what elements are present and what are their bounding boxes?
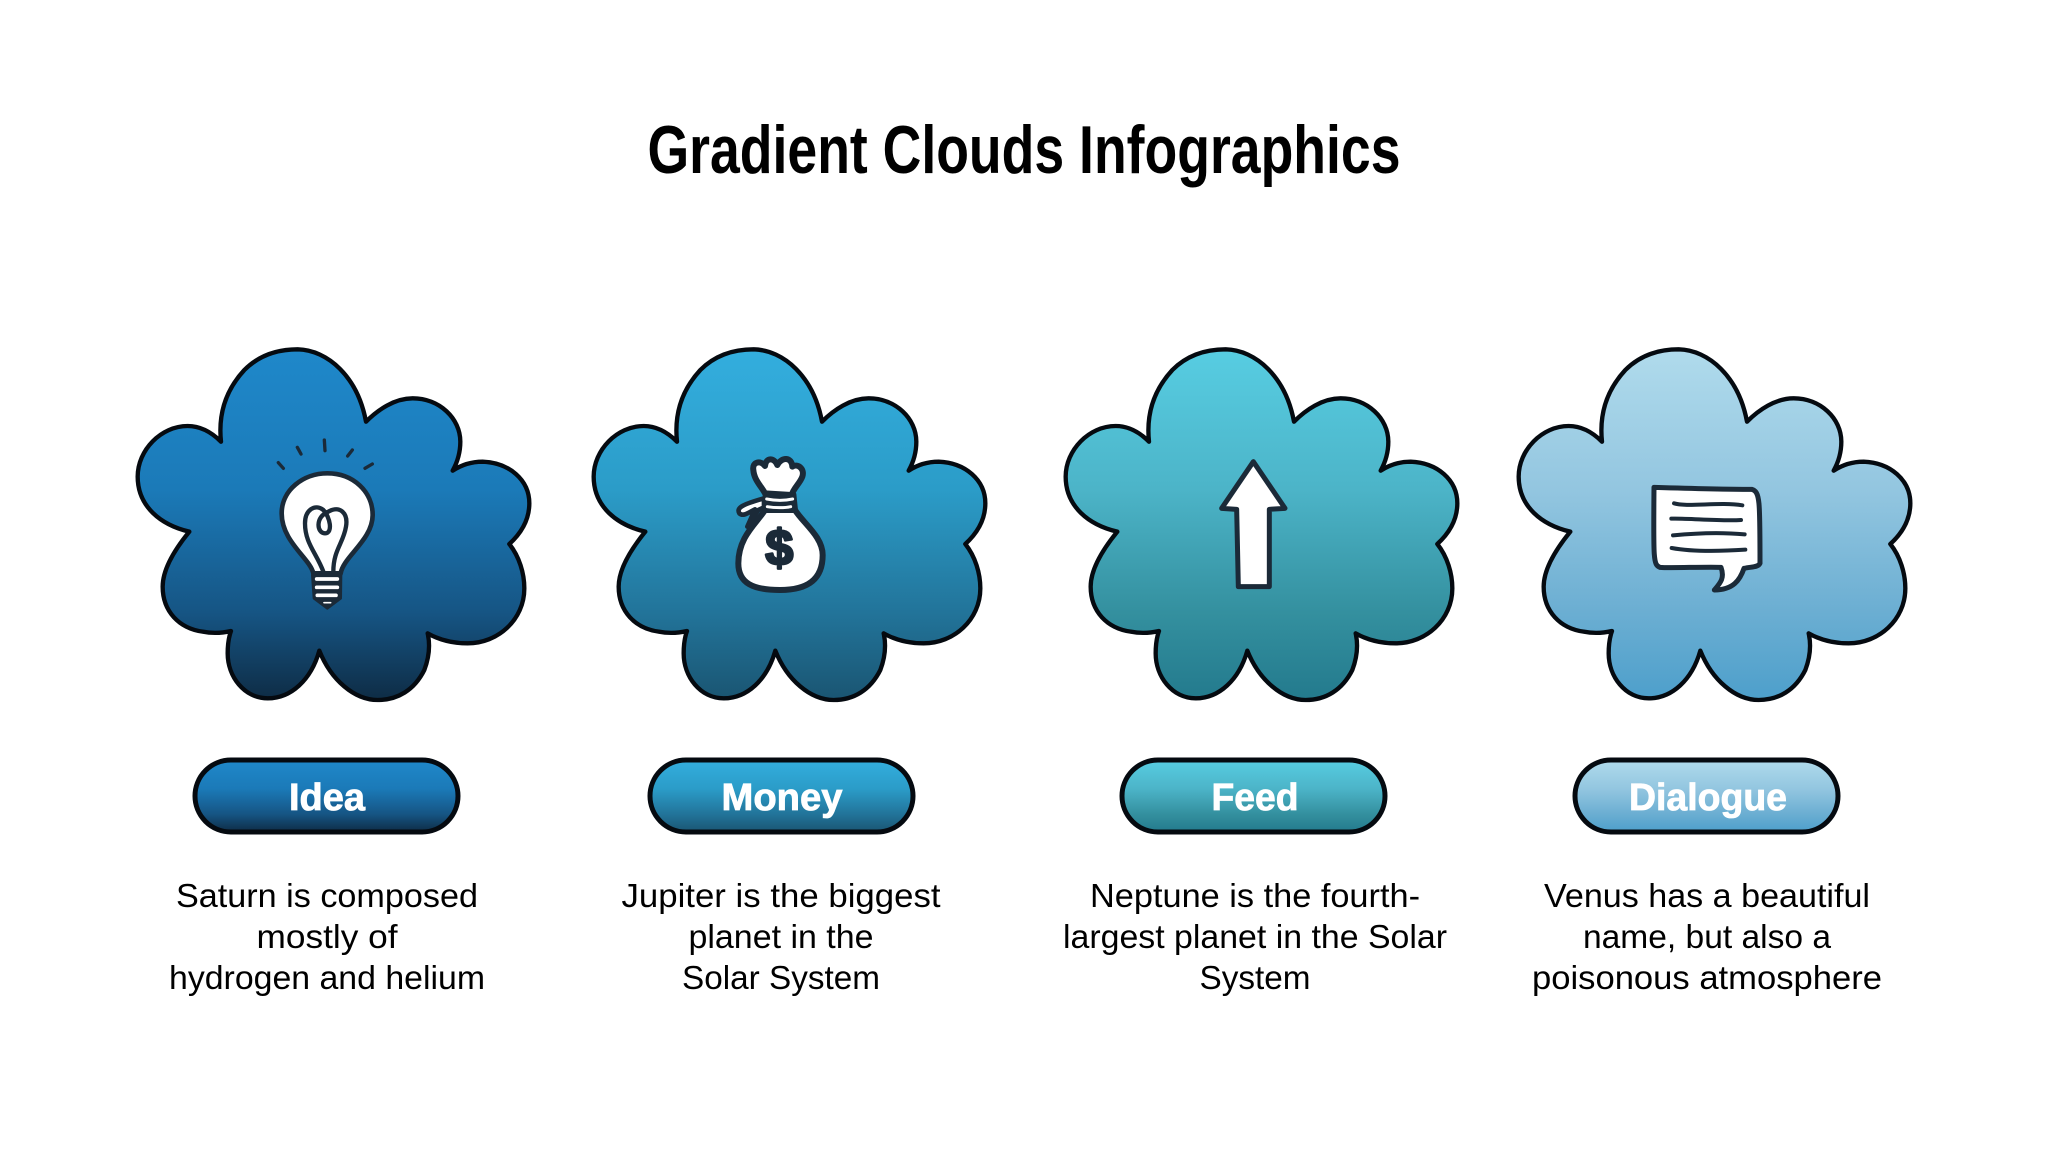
cloud: idea (138, 349, 529, 700)
description: dialogue: poisonous atmosphere (1532, 959, 1882, 996)
description: feed: System (1200, 959, 1310, 996)
description: dialogue (1532, 877, 1882, 996)
cloud: feed (1066, 349, 1457, 700)
description: idea: Saturn is composed (176, 877, 478, 914)
panel: idea (138, 349, 529, 996)
icon: money bag (738, 459, 823, 590)
description: money (622, 877, 940, 996)
panel: money (594, 349, 985, 996)
label pill: dialogue (1575, 760, 1838, 832)
title: Gradient Clouds Infographics (648, 112, 1400, 188)
label: idea: Idea (289, 777, 366, 819)
description: money: Solar System (682, 959, 880, 996)
label: feed: Feed (1212, 777, 1298, 819)
description: idea: hydrogen and helium (169, 959, 485, 996)
label pill: money (650, 760, 913, 832)
description: feed (1063, 877, 1447, 996)
icon: money bag: $ (765, 520, 793, 576)
cloud: money (594, 349, 985, 700)
description: money: Jupiter is the biggest (622, 877, 940, 914)
description: dialogue: name, but also a (1583, 918, 1832, 955)
description: feed: largest planet in the Solar (1063, 918, 1447, 955)
label: money: Money (722, 777, 842, 819)
label pill: feed (1122, 760, 1385, 832)
icon: speech bubble (1654, 487, 1760, 590)
description: money: planet in the (688, 918, 874, 955)
label: dialogue: Dialogue (1629, 777, 1787, 819)
cloud: dialogue (1519, 349, 1910, 700)
icon: arrow up (1222, 462, 1285, 587)
icon: light bulb (278, 440, 373, 608)
label pill: idea (195, 760, 458, 832)
panel: feed (1063, 349, 1457, 996)
description: dialogue: Venus has a beautiful (1544, 877, 1870, 914)
description: idea (169, 877, 485, 996)
panel: dialogue (1519, 349, 1910, 996)
description: idea: mostly of (256, 918, 398, 955)
description: feed: Neptune is the fourth- (1090, 877, 1420, 914)
